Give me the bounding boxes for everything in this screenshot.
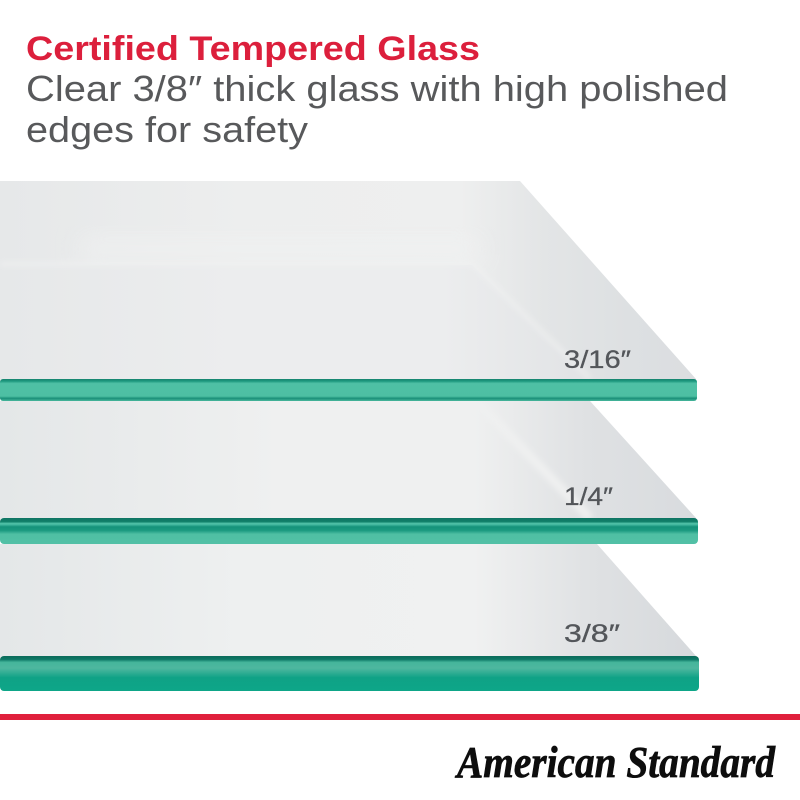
- description text: Clear 3/8″ thick glass with high polished: [26, 68, 728, 109]
- glass panel: 3/8 inch: [0, 544, 699, 691]
- glass panel: 3/16 inch: [0, 181, 697, 401]
- label: 1/4: 1/4″: [564, 483, 613, 511]
- glass panel: 1/4 inch: [0, 401, 698, 544]
- label: 3/8: 3/8″: [564, 620, 620, 648]
- title: Certified Tempered Glass: [26, 30, 480, 68]
- red divider: [0, 714, 800, 720]
- description text: [26, 68, 728, 150]
- description text: edges for safety: [26, 109, 308, 150]
- label: 3/16: 3/16″: [564, 346, 631, 374]
